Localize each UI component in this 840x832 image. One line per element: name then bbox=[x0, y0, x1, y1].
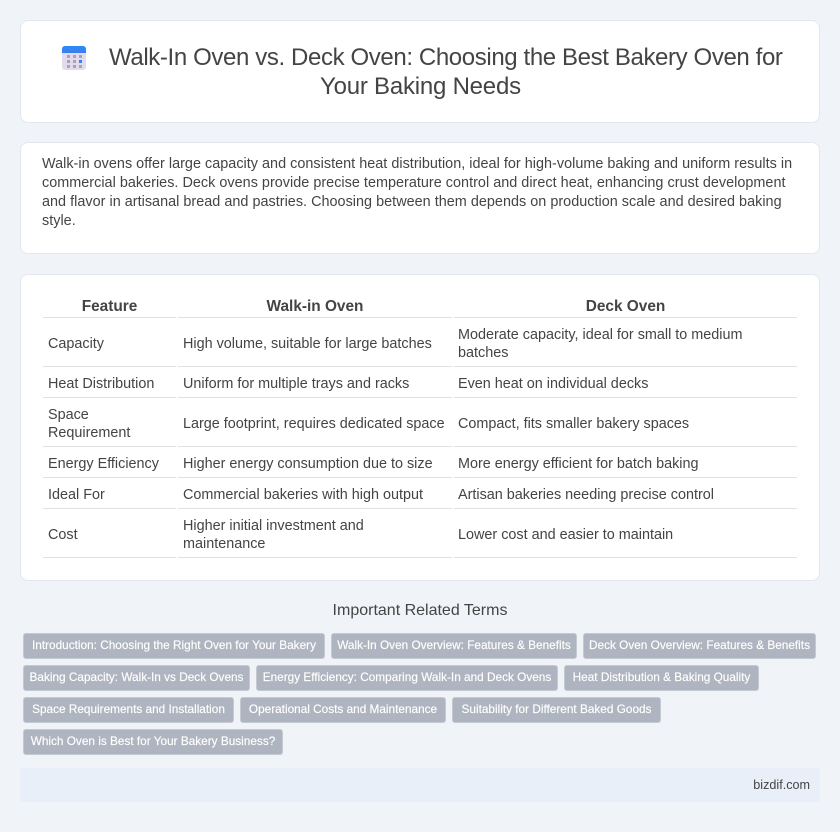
tags: related terms: Introduction: Choosing the Right Oven for Your Bakery bbox=[32, 638, 316, 652]
row: heat distribution: Heat Distribution bbox=[48, 376, 154, 392]
row: capacity: Capacity bbox=[48, 336, 104, 352]
tags: related terms bbox=[23, 633, 816, 755]
row: cost: Cost bbox=[48, 527, 78, 543]
row: energy efficiency bbox=[48, 456, 699, 472]
row: capacity: High volume, suitable for large batches bbox=[183, 336, 432, 352]
row: cost: Lower cost and easier to maintain bbox=[458, 527, 673, 543]
row: cost bbox=[48, 518, 673, 552]
text: Your Baking Needs bbox=[320, 73, 521, 100]
panel: comparison table bbox=[20, 274, 820, 581]
title bbox=[109, 44, 783, 100]
text: Walk-In Oven vs. Deck Oven: Choosing the Best Bakery Oven for bbox=[109, 44, 783, 71]
footer source: bizdif.com bbox=[753, 778, 810, 792]
intro text: style. bbox=[42, 213, 76, 229]
tags: related terms: Deck Oven Overview: Features & Benefits bbox=[589, 638, 810, 652]
heading: important related terms: Important Related Terms bbox=[333, 602, 507, 619]
tags: related terms: Energy Efficiency: Comparing Walk-In and Deck Ovens bbox=[263, 670, 551, 684]
row: energy efficiency: Energy Efficiency bbox=[48, 456, 159, 472]
tags: related terms: Space Requirements and Installation bbox=[32, 702, 225, 716]
intro text: and flavor in artisanal bread and pastries. Choosing between them depends on production scale and desired baking bbox=[42, 194, 782, 210]
row: capacity: batches bbox=[458, 345, 508, 361]
intro text: Walk-in ovens offer large capacity and consistent heat distribution, ideal for high-volume baking and uniform results in bbox=[42, 156, 792, 172]
row: space requirement: Compact, fits smaller bakery spaces bbox=[458, 416, 689, 432]
row: heat distribution bbox=[48, 376, 648, 392]
icon: calendar bbox=[62, 46, 86, 70]
row: cost: Higher initial investment and bbox=[183, 518, 364, 534]
row: capacity bbox=[48, 327, 742, 361]
tags: related terms: Heat Distribution & Baking Quality bbox=[573, 670, 750, 684]
row: ideal for: Ideal For bbox=[48, 487, 105, 503]
table header bbox=[82, 298, 665, 315]
row: space requirement: Requirement bbox=[48, 425, 130, 441]
row: ideal for: Commercial bakeries with high output bbox=[183, 487, 423, 503]
footer bar bbox=[20, 768, 820, 802]
row: space requirement: Large footprint, requires dedicated space bbox=[183, 416, 445, 432]
row: ideal for: Artisan bakeries needing precise control bbox=[458, 487, 714, 503]
table header: Feature bbox=[82, 298, 137, 315]
row: space requirement: Space bbox=[48, 407, 89, 423]
row: heat distribution: Uniform for multiple trays and racks bbox=[183, 376, 409, 392]
tags: related terms: Which Oven is Best for Your Bakery Business? bbox=[31, 734, 275, 748]
tags: related terms: Baking Capacity: Walk-In vs Deck Ovens bbox=[30, 670, 243, 684]
tags: related terms: Walk-In Oven Overview: Features & Benefits bbox=[337, 638, 571, 652]
intro text: commercial bakeries. Deck ovens provide precise temperature control and direct heat, enhancing crust development bbox=[42, 175, 786, 191]
tags: related terms: Operational Costs and Maintenance bbox=[249, 702, 437, 716]
row: capacity: Moderate capacity, ideal for small to medium bbox=[458, 327, 742, 343]
row: ideal for bbox=[48, 487, 714, 503]
row: energy efficiency: More energy efficient for batch baking bbox=[458, 456, 699, 472]
row: space requirement bbox=[48, 407, 689, 441]
table header: Walk-in Oven bbox=[267, 298, 363, 315]
tags: related terms: Suitability for Different Baked Goods bbox=[462, 702, 651, 716]
panel: title card bbox=[20, 20, 820, 123]
panel: intro card bbox=[20, 142, 820, 254]
row: heat distribution: Even heat on individual decks bbox=[458, 376, 648, 392]
row: cost: maintenance bbox=[183, 536, 265, 552]
row: energy efficiency: Higher energy consumption due to size bbox=[183, 456, 433, 472]
table header: Deck Oven bbox=[586, 298, 665, 315]
intro text bbox=[42, 156, 792, 229]
